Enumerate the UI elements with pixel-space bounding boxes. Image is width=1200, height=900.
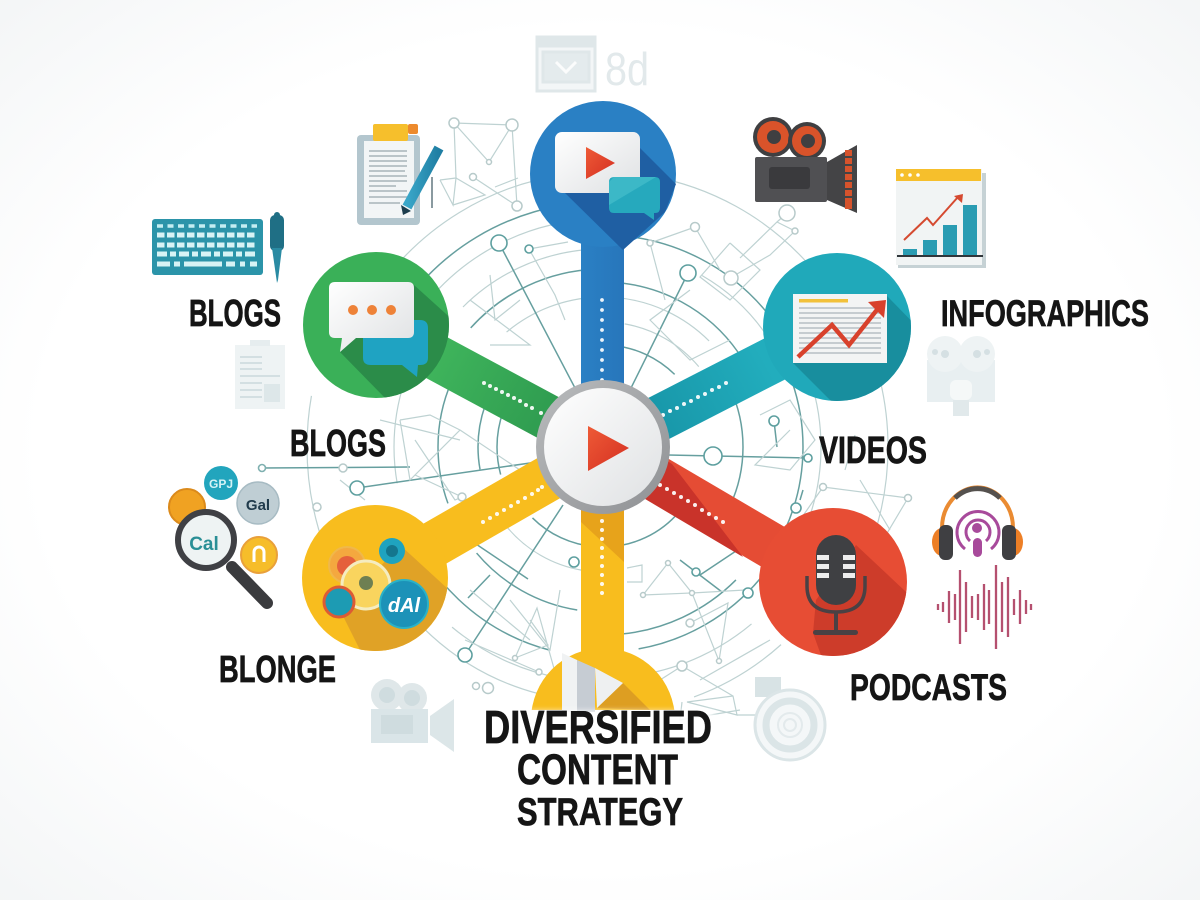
spoke dots: dotted white lines on each arm bbox=[481, 298, 728, 595]
faint icon: browser window bbox=[537, 37, 595, 91]
icon: coins and magnifier bbox=[169, 466, 279, 603]
label: blogs lower: BLOGS bbox=[290, 423, 386, 465]
arm shading: bottom yellow bbox=[581, 505, 624, 562]
faint icon: movie camera bbox=[371, 679, 454, 752]
faint icon: document bbox=[235, 340, 285, 409]
node: videos circle with screen and chat icon bbox=[530, 101, 676, 250]
icon: keyboard and pen bbox=[152, 212, 284, 283]
arm: videos (blue) bbox=[581, 174, 624, 447]
node: blogs circle with speech bubbles bbox=[303, 252, 455, 398]
node: podcasts circle with microphone bbox=[759, 508, 907, 656]
icon: coins and magnifier: Cal bbox=[189, 534, 219, 555]
central hub with play button bbox=[536, 380, 670, 514]
icon: film camera bbox=[753, 117, 857, 213]
network of circuit lines behind the hub bbox=[258, 118, 912, 743]
title glow bbox=[482, 711, 714, 827]
title: diversified content strategy: DIVERSIFIED bbox=[484, 701, 712, 753]
node: infographics circle with rising chart bbox=[763, 253, 911, 401]
arm: infographics (teal) bbox=[603, 327, 837, 447]
title: diversified content strategy bbox=[484, 701, 712, 834]
label: blogs upper: BLOGS bbox=[189, 293, 281, 335]
node: social circle with coins bbox=[302, 505, 448, 651]
icon: sound waveform bbox=[938, 565, 1031, 649]
icon: coins and magnifier: GPJ bbox=[209, 477, 233, 491]
title: diversified content strategy: CONTENT bbox=[517, 746, 678, 794]
label: blonge: BLONGE bbox=[219, 649, 336, 691]
faint icon: disc bbox=[755, 677, 825, 760]
node: strategy circle with folded play icon bbox=[532, 651, 674, 712]
icon: clipboard and pen bbox=[357, 124, 439, 225]
arm shading: red darker section bbox=[591, 427, 743, 557]
node: social circle with coins: dAl bbox=[388, 595, 421, 617]
icon: headphones with podcast symbol bbox=[932, 487, 1023, 560]
arm: strategy (yellow bottom) bbox=[581, 447, 624, 672]
arm: podcasts (red) bbox=[603, 447, 833, 582]
icon: coins and magnifier: Gal bbox=[246, 497, 270, 514]
faint icon: film reels bbox=[927, 336, 995, 416]
icon: bar chart window bbox=[896, 169, 986, 268]
arm: blogs (green) bbox=[376, 325, 603, 447]
title: diversified content strategy: STRATEGY bbox=[517, 791, 683, 834]
arm: social (yellow left) bbox=[375, 447, 603, 578]
label: videos: VIDEOS bbox=[819, 430, 927, 472]
label: podcasts: PODCASTS bbox=[850, 667, 1007, 708]
faint label: 8d: 8d bbox=[605, 43, 649, 95]
